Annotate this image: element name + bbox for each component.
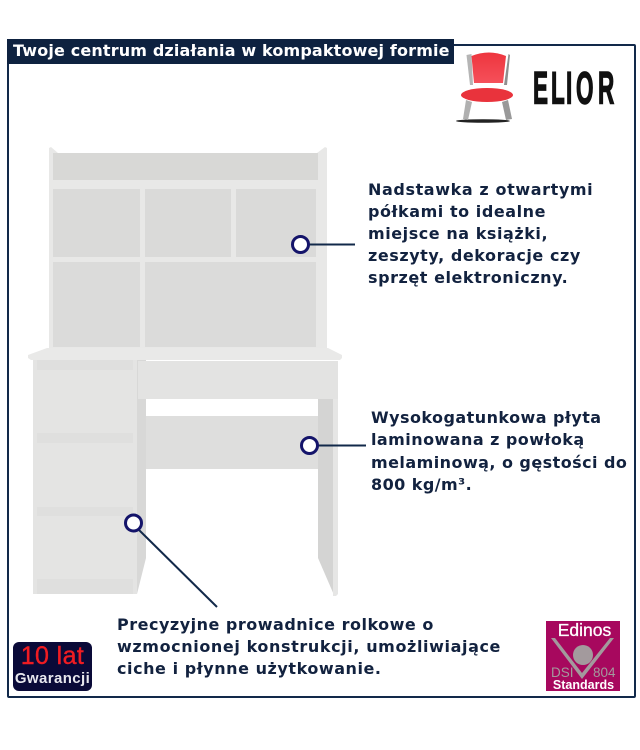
- badge: warranty: Gwarancji: [15, 670, 90, 687]
- badge: warranty: [13, 642, 92, 691]
- text: hutch: miejsce na książki,: [368, 224, 548, 243]
- badge: Edinos: DSI: [551, 665, 574, 680]
- text: hutch: zeszyty, dekoracje czy: [368, 246, 581, 265]
- hutch: [49, 147, 327, 350]
- back panel: [146, 416, 318, 469]
- text: hutch: sprzęt elektroniczny.: [368, 268, 568, 287]
- text: hutch: Nadstawka z otwartymi: [368, 180, 593, 199]
- text: board: melaminową, o gęstości do: [371, 453, 627, 472]
- marker dots: [126, 236, 318, 531]
- text: board: 800 kg/m³.: [371, 475, 472, 494]
- text: runners: [117, 615, 501, 678]
- text: board: [371, 408, 627, 494]
- right leg: [318, 399, 338, 596]
- text: board: Wysokogatunkowa płyta: [371, 408, 602, 427]
- centre drawer: [138, 361, 338, 399]
- text: runners: Precyzyjne prowadnice rolkowe o: [117, 615, 434, 634]
- title: Twoje centrum działania w kompaktowej formie: [13, 41, 450, 60]
- connector lines: [139, 244, 366, 607]
- desktop: [28, 348, 342, 360]
- logo: Elior: [456, 52, 614, 123]
- badge: Edinos: 804: [593, 665, 616, 680]
- text: runners: wzmocnionej konstrukcji, umożliwiające: [117, 637, 501, 656]
- badge: warranty: 10 lat: [21, 642, 84, 670]
- logo wordmark: ELIOR: [533, 63, 614, 114]
- icon: chair: [456, 52, 513, 123]
- text: hutch: półkami to idealne: [368, 202, 546, 221]
- badge: Edinos: [546, 621, 620, 691]
- cabinet: [33, 360, 146, 594]
- text: board: laminowana z powłoką: [371, 430, 585, 449]
- text: runners: ciche i płynne użytkowanie.: [117, 659, 382, 678]
- text: hutch: [368, 180, 593, 287]
